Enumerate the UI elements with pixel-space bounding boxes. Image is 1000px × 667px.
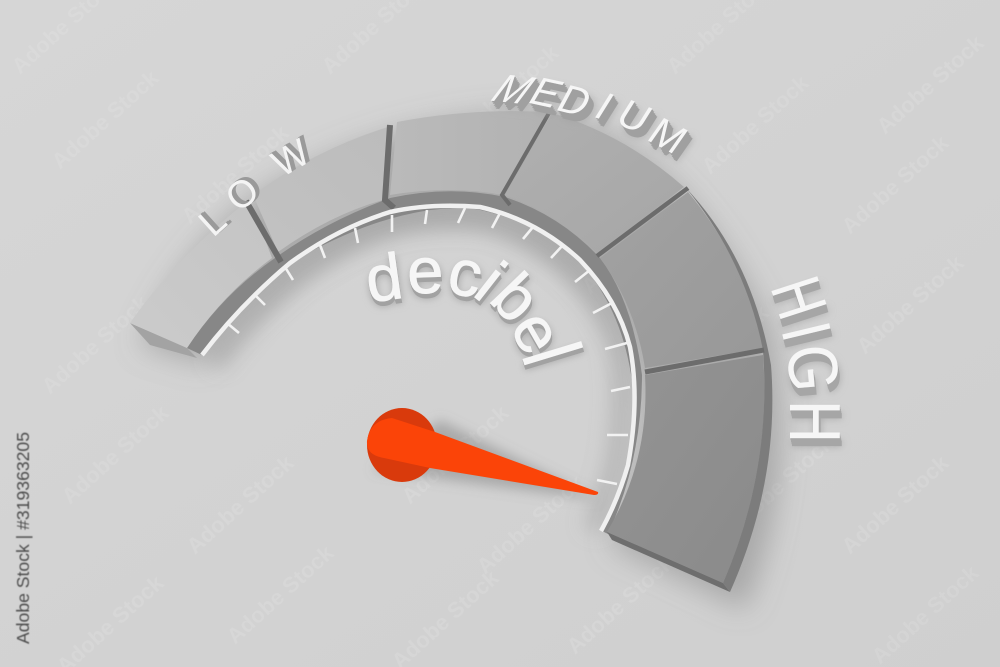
label: LOW: L <box>191 199 235 245</box>
watermarks: Adobe Stock <box>57 400 174 509</box>
watermarks: Adobe Stock <box>47 65 164 174</box>
label: MEDIUM: M <box>640 110 695 162</box>
label: decibel: l <box>505 333 599 374</box>
tick marks <box>227 208 630 484</box>
segment dividers <box>246 113 764 372</box>
bottom edge <box>607 532 730 592</box>
label: decibel <box>361 233 599 374</box>
watermarks: Adobe Stock <box>562 550 679 659</box>
segment 6 <box>607 355 764 583</box>
gauge scale <box>130 111 772 592</box>
label: MEDIUM <box>481 68 695 162</box>
watermarks: Adobe Stock <box>472 470 589 579</box>
watermarks: Adobe Stock <box>837 130 954 239</box>
label: LOW: W <box>265 131 317 186</box>
segment 1 <box>130 199 272 358</box>
watermarks: Adobe Stock <box>722 430 839 539</box>
watermarks: Adobe Stock <box>867 560 984 667</box>
watermarks: Adobe Stock <box>182 450 299 559</box>
segment 3 <box>390 111 547 195</box>
needle shadow <box>372 420 600 500</box>
label: decibel: e <box>406 233 445 308</box>
watermarks: Adobe Stock <box>177 120 294 229</box>
label: MEDIUM: E <box>521 69 571 116</box>
needle pointer <box>367 418 598 495</box>
label: decibel: d <box>361 239 407 316</box>
needle hub <box>367 408 437 482</box>
watermarks: Adobe Stock <box>657 300 774 409</box>
label: MEDIUM: I <box>587 84 622 128</box>
inner arc shade <box>215 219 621 530</box>
gauge drop shadow <box>140 113 781 610</box>
label: decibel: e <box>497 298 578 366</box>
segment 5 <box>600 192 763 368</box>
label: MEDIUM: M <box>481 68 545 112</box>
label: HIGH: G <box>772 341 854 394</box>
label: LOW: O <box>218 169 267 220</box>
label: HIGH: H <box>755 268 841 328</box>
label: decibel: b <box>477 259 555 336</box>
inner band <box>187 191 642 534</box>
watermarks: Adobe Stock <box>577 190 694 299</box>
watermarks: Adobe Stock <box>697 70 814 179</box>
outer side edge <box>686 188 772 592</box>
watermarks: Adobe Stock <box>837 450 954 559</box>
label: HIGH <box>755 268 854 443</box>
label: MEDIUM: U <box>609 92 660 141</box>
stock id: Adobe Stock | #319363205 <box>13 432 33 644</box>
white arc <box>202 206 635 531</box>
watermarks: Adobe Stock <box>872 30 989 139</box>
label: HIGH: H <box>774 400 854 443</box>
label: decibel: c <box>442 234 489 312</box>
watermarks: Adobe Stock <box>222 540 339 649</box>
watermarks: Adobe Stock <box>447 40 564 149</box>
segment 4 <box>505 113 684 253</box>
label: decibel: i <box>463 248 519 314</box>
label: LOW <box>191 131 317 245</box>
label: MEDIUM: D <box>550 76 600 125</box>
watermarks: Adobe Stock <box>37 290 154 399</box>
watermarks: Adobe Stock <box>397 400 514 509</box>
segment 2 <box>253 127 388 252</box>
needle <box>367 408 598 495</box>
label: HIGH: I <box>766 315 845 348</box>
watermarks: Adobe Stock <box>852 250 969 359</box>
